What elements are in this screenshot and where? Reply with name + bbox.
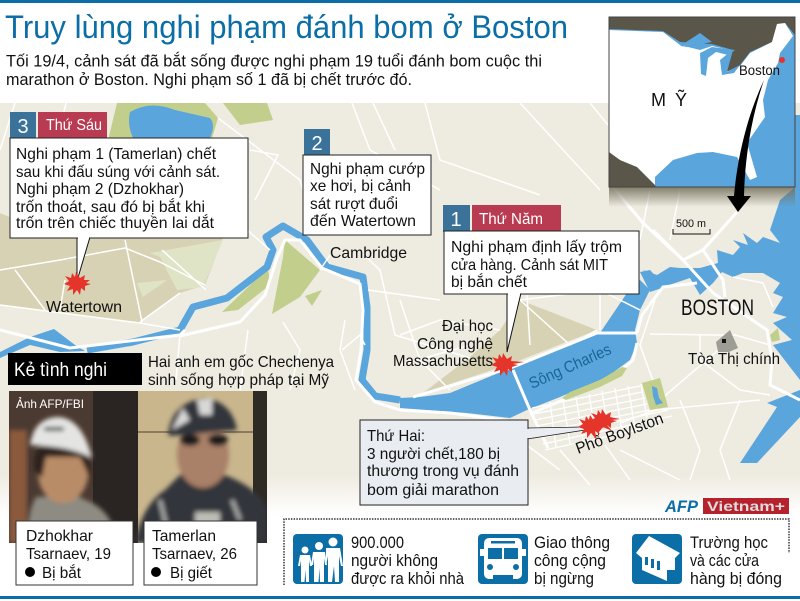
inset map shadow [609, 187, 795, 207]
callout 3: Friday [10, 112, 248, 281]
map place labels: Watertown [46, 299, 122, 316]
right suspect [135, 398, 267, 543]
callout 1: Thursday: cửa hàng. Cảnh sát MIT [451, 257, 608, 274]
map place labels [46, 245, 780, 458]
text: transit [534, 534, 610, 588]
text: people: 900.000 [351, 534, 404, 552]
scale bar 500 m [673, 218, 710, 234]
suspects description: sinh sống hợp pháp tại Mỹ [148, 372, 329, 389]
map place labels: Massachusetts [393, 353, 493, 370]
water: pond [129, 105, 213, 138]
map place labels: BOSTON [681, 295, 754, 320]
callout 2: sát rượt đuổi [310, 195, 398, 213]
intro text [6, 52, 542, 89]
callout 3: Friday: sau khi đấu súng với cảnh sát. [16, 164, 220, 181]
text: transit: công cộng [534, 552, 606, 570]
name card: Dzhokhar: Tsarnaev, 19 [26, 546, 111, 563]
map areas: parks [107, 103, 780, 342]
name card: Tamerlan: Tsarnaev, 26 [152, 546, 237, 563]
name card: Dzhokhar: Dzhokhar [26, 528, 94, 545]
suspects description [148, 354, 334, 389]
panel: consequences border [284, 519, 789, 585]
callout: Monday: Thứ Hai: [367, 428, 425, 445]
text: people: được ra khỏi nhà [351, 570, 465, 588]
callout 3: Friday: Nghi phạm 2 (Dzhokhar) [16, 181, 184, 198]
icon: building [632, 534, 682, 584]
water: Charles river and basin [0, 226, 650, 418]
bottom bar [0, 596, 800, 599]
text: people: người không [351, 552, 438, 570]
text: schools [690, 534, 782, 588]
road network [0, 103, 773, 485]
city hall block [716, 330, 738, 352]
map place labels: Cambridge [330, 245, 407, 262]
arrow from inset to Boston map [727, 80, 764, 212]
callout: Monday: 3 người chết,180 bị [367, 446, 500, 463]
name card: Tamerlan: Tamerlan [152, 528, 216, 545]
text: schools: và các cửa [690, 552, 760, 570]
map place labels: Đại học [442, 318, 493, 335]
text: people [351, 534, 465, 588]
callout 3: Friday: Thứ Sáu [46, 117, 102, 134]
name card: Dzhokhar: Bị bắt [42, 563, 82, 582]
callout 3: Friday: 3 [17, 116, 29, 138]
heading: suspects [8, 353, 142, 385]
map place labels: Công nghệ [417, 336, 493, 353]
photo credit: Ảnh AFP/FBI [16, 396, 84, 411]
suspects description: Hai anh em gốc Chechenya [148, 354, 334, 371]
explosion marker: Watertown [64, 272, 91, 295]
text: schools: hàng bị đóng [690, 570, 782, 588]
map of Boston [0, 103, 800, 515]
park: Esplanade strip [562, 367, 627, 400]
map place labels: Phố Boylston [574, 410, 666, 458]
inset map of USA: Boston [739, 63, 780, 78]
park: Public Garden [642, 378, 668, 410]
inset labels: M Ỹ [651, 89, 689, 110]
explosion marker: MIT [491, 353, 524, 376]
top bar [0, 0, 800, 3]
callout 3: Friday: Nghi phạm 1 (Tamerlan) chết [16, 146, 217, 163]
intro text: Tối 19/4, cảnh sát đã bắt sống được nghi phạm 19 tuổi đánh bom cuộc thi [6, 52, 542, 70]
left suspect [26, 414, 114, 520]
Back Bay street grid [532, 384, 672, 450]
name card: Tamerlan [144, 521, 257, 585]
icon: family [293, 534, 343, 584]
callout: Monday: thương trong vụ đánh [367, 463, 519, 480]
name card: Tamerlan: Bị giết [170, 565, 213, 582]
callout 2: 2 [311, 133, 323, 155]
callout: Monday: bom giải marathon [367, 482, 499, 499]
heading: suspects: Kẻ tình nghi [14, 360, 107, 381]
text: schools: Trường học [690, 534, 768, 552]
photo of suspects [9, 391, 267, 543]
callout: Monday [360, 420, 585, 505]
icon: bus [478, 534, 528, 584]
callout 1: Thursday: Nghi phạm định lấy trộm [451, 239, 622, 256]
inset map of USA [609, 17, 795, 187]
Vietnam+ logo: Vietnam+ [707, 498, 785, 514]
callout 2: xe hơi, bị cảnh [310, 178, 411, 195]
main roads [0, 187, 800, 448]
water: harbour [640, 115, 800, 463]
map areas: tan districts [0, 213, 597, 393]
callout 2: đến Watertown [310, 213, 416, 230]
fade at bottom of map [0, 475, 800, 515]
callout 1: Thursday: bị bắn chết [451, 272, 528, 291]
intro text: marathon ở Boston. Nghi phạm số 1 đã bị chết trước đó. [6, 71, 412, 89]
explosion markers: marathon finish [578, 409, 620, 440]
callout 3: Friday: trốn thoát, sau đó bị bắt khi [16, 197, 205, 216]
scale bar 500 m: 500 m [676, 218, 706, 230]
map place labels: Tòa Thị chính [688, 351, 780, 368]
text: transit: Giao thông [534, 534, 610, 552]
callout 3: Friday: trốn trên chiếc thuyền lai dắt [16, 213, 215, 232]
map place labels: Sông Charles [527, 341, 614, 393]
callout 2 [303, 129, 431, 235]
callout 1: Thursday [443, 205, 639, 352]
callout 1: Thursday: Thứ Năm [479, 211, 543, 228]
name card: Dzhokhar [16, 521, 133, 585]
text: transit: bị ngừng [534, 570, 594, 588]
AFP logo: AFP [664, 497, 699, 516]
callout 2: Nghi phạm cướp [310, 161, 425, 178]
title: Truy lùng nghi phạm đánh bom ở Boston [5, 9, 568, 45]
callout 1: Thursday: 1 [450, 209, 462, 231]
